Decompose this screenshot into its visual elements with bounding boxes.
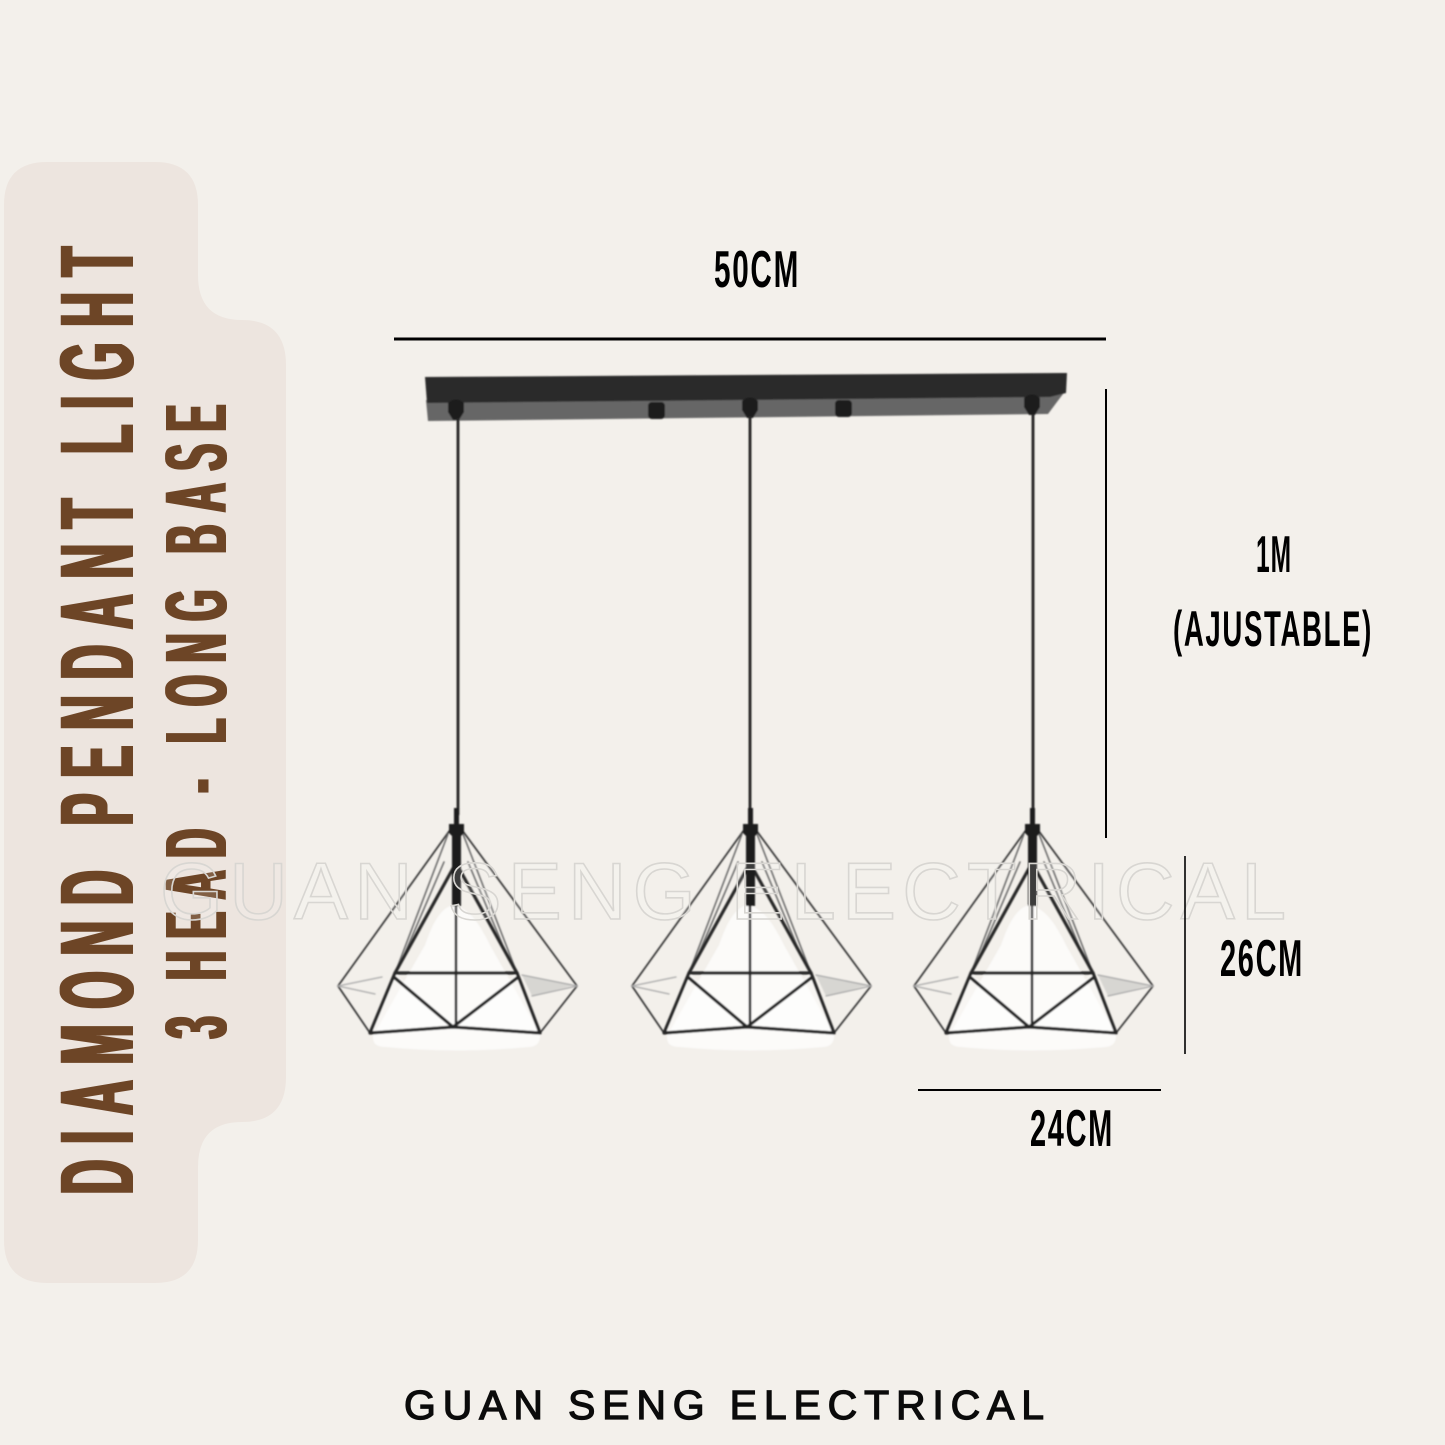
dimension: shade height 26cm: 26CM	[1220, 930, 1304, 988]
watermark: GUAN SENG ELECTRICAL	[160, 847, 1286, 937]
lamp shade: centre	[632, 808, 871, 1050]
subheading: model description: 3 HEAD - LONG BASE	[149, 405, 245, 1038]
panel: product title background	[4, 162, 286, 1283]
dimension: cord length 1m	[1106, 389, 1373, 838]
lamp shade: left	[338, 808, 577, 1050]
pendant light product illustration	[338, 373, 1153, 1050]
dimension: shade width 24cm: 24CM	[1030, 1100, 1114, 1158]
brand footer: GUAN SENG ELECTRICAL	[404, 1382, 1044, 1428]
lamp shade: right	[914, 808, 1153, 1050]
dimension: width 50cm: 50CM	[714, 241, 800, 299]
dimension: cord length 1m: 1M	[1256, 526, 1292, 584]
heading: product title: DIAMOND PENDANT LIGHT	[39, 247, 156, 1194]
ceiling base bar	[425, 373, 1067, 421]
cords	[458, 414, 1033, 815]
